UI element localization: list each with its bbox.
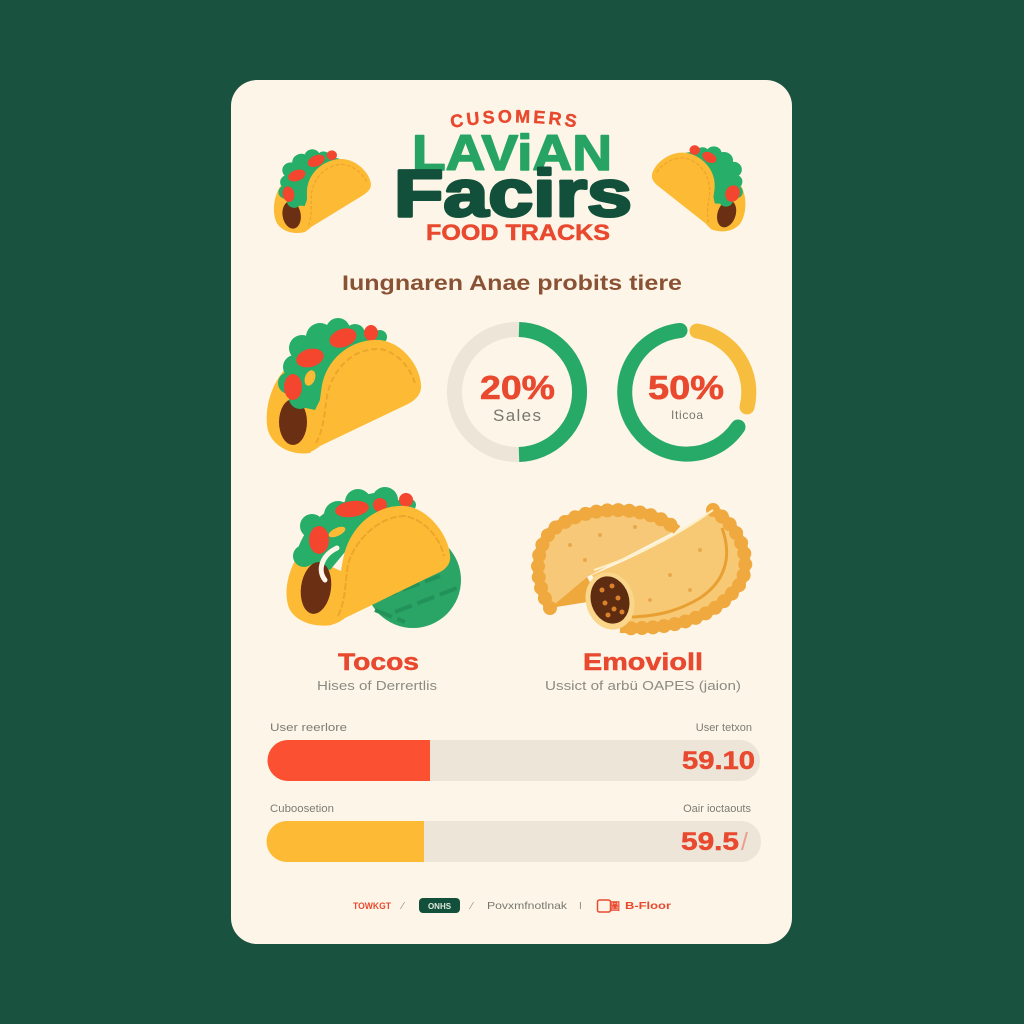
icon: taco on green circle <box>286 487 461 628</box>
title block <box>394 110 632 245</box>
label: emovioll: Emovioll <box>583 649 703 676</box>
footer: ONHS <box>428 902 452 911</box>
footer <box>353 898 671 913</box>
bar: user retention <box>268 722 760 781</box>
chart: donut 50%: Iticoa <box>671 408 703 422</box>
title: food tracks: FOOD TRACKS <box>426 220 610 245</box>
bar: conversion: 59.5 <box>681 828 739 856</box>
label: emovioll <box>545 649 741 693</box>
footer: ⁄ <box>399 901 405 912</box>
title: customers: CUSOMERS <box>450 110 576 128</box>
footer: 圖 <box>610 901 620 913</box>
chart: donut 20% sales <box>454 330 580 454</box>
footer: TOWKGT <box>353 901 391 912</box>
footer: I <box>579 901 582 912</box>
bar: user retention: 59.10 <box>682 747 755 775</box>
chart: donut 50% <box>625 330 749 454</box>
icon: small taco left <box>265 142 377 236</box>
chart: donut 20% sales: 20% <box>480 369 555 406</box>
title: lavian: LAViAN <box>412 125 612 181</box>
title: facirs: Facirs <box>394 156 632 230</box>
footer: Povxmfnotlnak <box>487 900 568 912</box>
bar: user retention: User tetxon <box>696 722 752 734</box>
bar: user retention: User reerlore <box>270 722 347 734</box>
panel: card <box>231 80 792 944</box>
bar: conversion: Oair ioctaouts <box>683 803 751 815</box>
chart: donut 50%: 50% <box>648 369 724 406</box>
label: tocos: Hises of Derrertlis <box>317 678 438 693</box>
icon: large taco <box>267 318 421 453</box>
footer: ⁄ <box>468 901 474 912</box>
icon: small taco right <box>641 134 761 236</box>
chart: donut 20% sales: Sales <box>493 406 541 425</box>
footer: B-Floor <box>625 901 671 912</box>
subtitle: Iungnaren Anae probits tiere <box>342 272 682 295</box>
bar: conversion <box>266 803 761 862</box>
icon: empanadas <box>538 510 745 636</box>
label: emovioll: Ussict of arbü OAPES (jaion) <box>545 678 741 693</box>
label: tocos: Tocos <box>338 649 419 676</box>
label: tocos <box>317 649 438 693</box>
bar: conversion: / <box>741 828 748 856</box>
bar: conversion: Cuboosetion <box>270 803 334 815</box>
